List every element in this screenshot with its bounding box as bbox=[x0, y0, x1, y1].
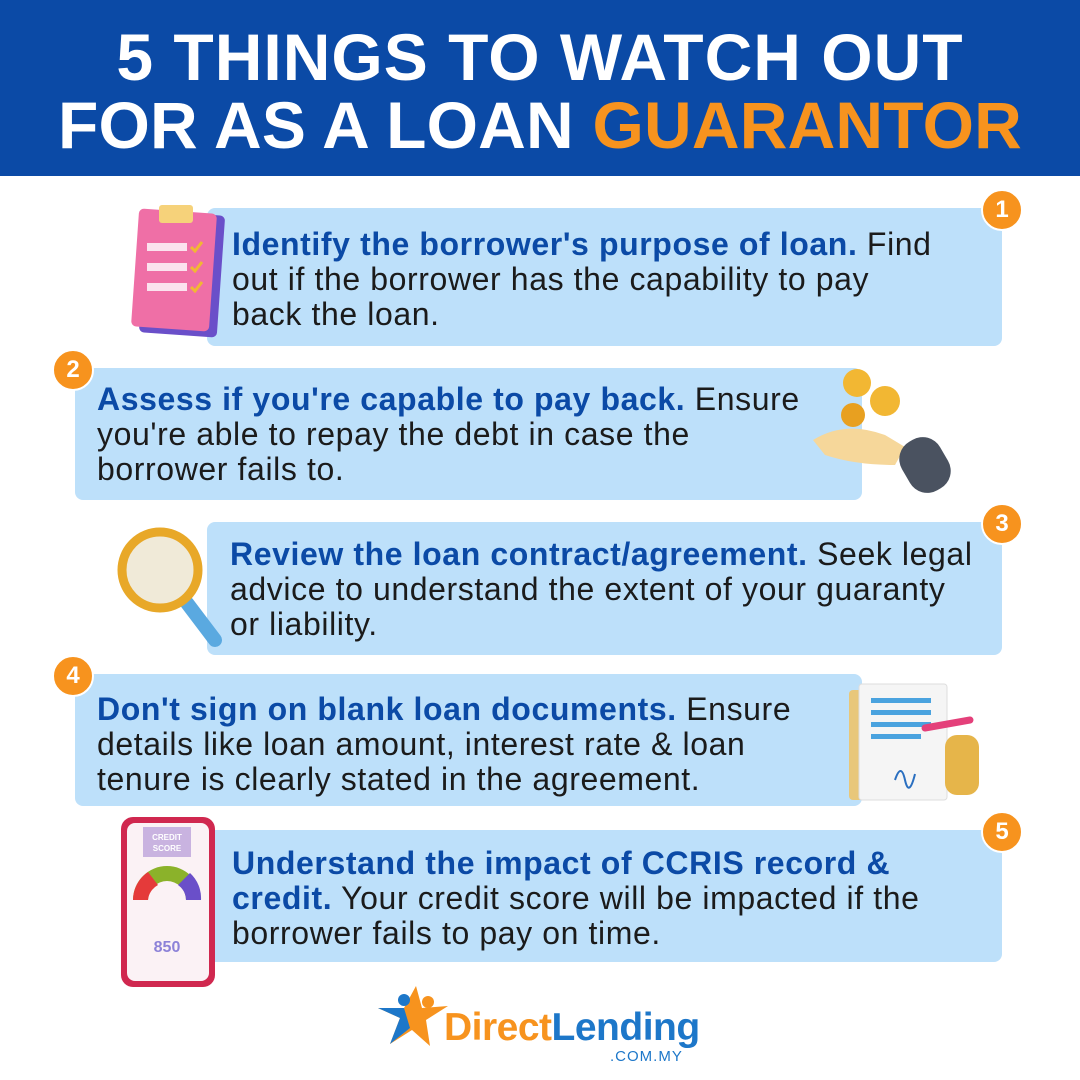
text 4 bbox=[97, 691, 791, 797]
text 2: you're able to repay the debt in case the bbox=[97, 416, 690, 452]
icon: star figures bbox=[378, 986, 448, 1046]
icon: phone credit score bbox=[121, 817, 215, 987]
text 3: advice to understand the extent of your guaranty bbox=[230, 571, 945, 607]
badge 3 bbox=[981, 503, 1023, 545]
icon: phone credit score: SCORE bbox=[153, 844, 182, 853]
logo subtext: .COM.MY bbox=[610, 1048, 683, 1065]
text 4: details like loan amount, interest rate & loan bbox=[97, 726, 745, 762]
panel: item 5 bbox=[207, 830, 1002, 962]
title line 2: FOR AS A LOAN GUARANTOR bbox=[58, 88, 1022, 162]
text 2 bbox=[97, 381, 800, 487]
panel: item 2 bbox=[75, 368, 862, 500]
panel: item 1 bbox=[207, 208, 1002, 346]
text 5: credit. Your credit score will be impacted if the bbox=[232, 880, 920, 916]
text 4: Don't sign on blank loan documents. Ensure bbox=[97, 691, 791, 727]
panel: item 4 bbox=[75, 674, 862, 806]
text 2: borrower fails to. bbox=[97, 451, 344, 487]
icon: signing document bbox=[849, 684, 979, 800]
icon: hand with coins bbox=[813, 369, 951, 493]
badge 3: 3 bbox=[995, 510, 1009, 537]
text 5 bbox=[232, 845, 920, 951]
text 5: borrower fails to pay on time. bbox=[232, 915, 661, 951]
icon: magnifier bbox=[118, 528, 222, 647]
icon: phone credit score: 850 bbox=[154, 939, 180, 956]
text 3: or liability. bbox=[230, 606, 378, 642]
badge 1: 1 bbox=[995, 196, 1009, 223]
badge 5: 5 bbox=[995, 818, 1009, 845]
text 2: Assess if you're capable to pay back. Ensure bbox=[97, 381, 800, 417]
badge 4 bbox=[52, 655, 94, 697]
text 4: tenure is clearly stated in the agreement. bbox=[97, 761, 700, 797]
badge 1 bbox=[981, 189, 1023, 231]
panel: item 3 bbox=[207, 522, 1002, 655]
badge 2: 2 bbox=[66, 356, 80, 383]
header bbox=[0, 0, 1080, 176]
text 1 bbox=[232, 226, 932, 332]
text 1: Identify the borrower's purpose of loan. Find bbox=[232, 226, 932, 262]
badge 4: 4 bbox=[66, 662, 80, 689]
title line 1: 5 THINGS TO WATCH OUT bbox=[116, 20, 964, 94]
badge 5 bbox=[981, 811, 1023, 853]
text 5: Understand the impact of CCRIS record & bbox=[232, 845, 890, 881]
text 1: back the loan. bbox=[232, 296, 440, 332]
icon: clipboard bbox=[131, 205, 225, 338]
text 3 bbox=[230, 536, 973, 642]
badge 2 bbox=[52, 349, 94, 391]
logo text: DirectLending bbox=[444, 1006, 700, 1049]
icon: phone credit score: CREDIT bbox=[152, 833, 182, 842]
text 1: out if the borrower has the capability to pay bbox=[232, 261, 869, 297]
text 3: Review the loan contract/agreement. Seek legal bbox=[230, 536, 973, 572]
logo: DirectLending bbox=[378, 986, 700, 1065]
